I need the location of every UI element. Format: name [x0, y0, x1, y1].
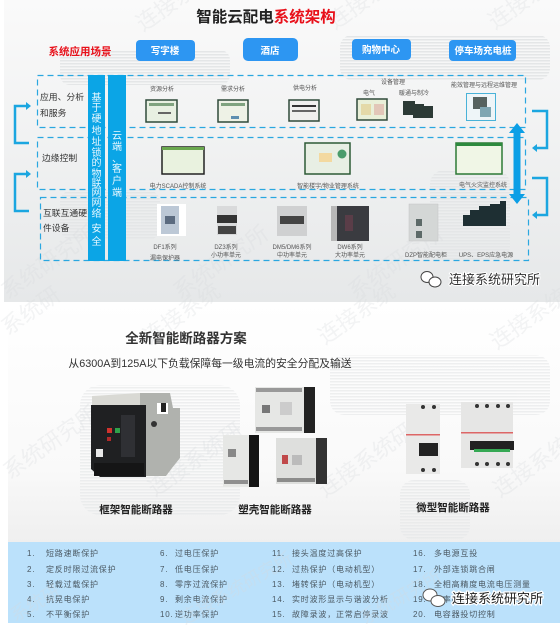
hardware devices: DZ3系列: [214, 243, 238, 251]
column 1: 2.: [27, 565, 35, 574]
column 2: 剩余电流保护: [175, 594, 228, 604]
column 3: 实时波形显示与谐波分析: [292, 594, 389, 604]
product: miniature breakers: [406, 402, 514, 474]
watermarks: [0, 0, 560, 304]
vertical bar: IoT security: 物: [92, 167, 102, 180]
scenario buttons: 购物中心: [362, 44, 400, 56]
vertical bar: IoT security: [88, 75, 105, 261]
application layer screens: 暖通与制冷: [399, 89, 429, 97]
watermarks: 系统研究所: [344, 221, 448, 304]
column 4: 功率因数电能质量管理: [434, 594, 522, 604]
subheading: 从6300A到125A以下负载保障每一级电流的安全分配及输送: [68, 356, 352, 370]
watermarks: [7, 548, 445, 625]
watermarks: 连接系统研究: [314, 406, 436, 502]
column 4: 16.: [413, 549, 427, 558]
vertical bar: cloud and client: [108, 75, 126, 261]
watermarks: [0, 278, 560, 502]
column 2: [160, 548, 228, 619]
product: frame breaker: [91, 393, 180, 477]
hardware devices: UPS、EPS应急电源: [459, 251, 513, 259]
wechat logo and source name: [423, 589, 543, 606]
watermarks: 系统研: [7, 581, 64, 625]
column 4: 全相高精度电流电压测量: [434, 579, 531, 589]
layer labels: 应用、分析: [40, 91, 84, 102]
scenario buttons: 写字楼: [151, 45, 180, 57]
panel: smart circuit breaker: [0, 278, 560, 542]
caption: moulded case breaker: 塑壳智能断路器: [238, 503, 312, 516]
column 2: 6.: [160, 549, 168, 558]
column 4: 17.: [413, 565, 427, 574]
column 4: 外部连锁跳合闸: [434, 564, 496, 574]
scenario buttons: 酒店: [260, 45, 280, 57]
column 1: [27, 548, 116, 619]
edge control screens: 电力SCADA控制系统: [150, 182, 206, 190]
column 2: 9.: [160, 595, 168, 604]
layer labels: 边缘控制: [42, 152, 77, 163]
column 4: [413, 548, 531, 619]
column 3: 11.: [272, 549, 285, 558]
hardware devices: 漏电保护器: [150, 254, 180, 262]
column 2: 逆功率保护: [175, 609, 219, 619]
hardware devices: 大功率单元: [335, 251, 365, 259]
column 2: 过电压保护: [175, 548, 219, 558]
watermarks: 系统研究所: [169, 221, 273, 304]
column 3: 15.: [272, 610, 286, 619]
heading: 全新智能断路器方案: [125, 330, 247, 346]
hardware devices: DF1系列: [153, 243, 177, 251]
column 4: 电容器投切控制: [434, 609, 496, 619]
layer labels: 和服务: [40, 107, 67, 118]
edge control screens: 电气火灾监控系统: [459, 181, 507, 189]
heading: application scenarios: 系统应用场景: [48, 45, 112, 58]
caption: frame breaker: 框架智能断路器: [99, 503, 173, 516]
hardware devices: 小功率单元: [211, 251, 241, 259]
title: 智能云配电系统架构: [196, 7, 336, 26]
watermarks: 连接系统: [314, 278, 400, 349]
column 3: 堵转保护（电动机型）: [292, 579, 380, 589]
column 3: 故障录波，正常启停录波: [292, 609, 389, 619]
column 2: 7.: [160, 565, 168, 574]
application layer screens: 能效管理与远程运维管理: [451, 81, 517, 89]
vertical bar: IoT security: 硬: [92, 113, 102, 125]
loop arrows: [15, 102, 547, 219]
vertical bar: IoT security: 基: [92, 91, 102, 104]
vertical bar: IoT security: 的: [92, 156, 102, 169]
hardware devices: DW6系列: [337, 243, 363, 251]
wechat logo and source name: 连接系统研究所: [449, 272, 540, 287]
column 3: [272, 548, 389, 619]
panel: protection functions list: [7, 542, 560, 625]
layer labels: [40, 91, 87, 233]
world map backdrop: [80, 355, 550, 540]
watermarks: 连接系统研: [144, 418, 248, 501]
vertical bar: IoT security: 络: [92, 207, 102, 220]
column 3: 接头温度过高保护: [292, 548, 362, 558]
layer labels: 件设备: [43, 222, 70, 233]
column 1: 轻载过载保护: [46, 579, 99, 589]
column 1: 5.: [27, 610, 35, 619]
dashed layer boxes: [38, 76, 528, 260]
hardware devices: [150, 201, 513, 262]
product: moulded case breakers: [223, 387, 327, 487]
application layer screens: 资源分析: [150, 85, 174, 93]
scenario buttons: 停车场充电桩: [454, 45, 512, 57]
caption: miniature breaker: 微型智能断路器: [416, 501, 490, 514]
column 1: 抗晃电保护: [46, 594, 90, 604]
column 4: 18.: [413, 580, 427, 589]
application layer screens: 设备管理: [381, 78, 405, 86]
edge control screens: 智能楼宇/物业管理系统: [297, 182, 359, 190]
hardware devices: DM5/DM6系列: [272, 243, 312, 251]
column 1: 1.: [27, 549, 35, 558]
column 4: 20.: [413, 610, 427, 619]
column 1: 不平衡保护: [46, 609, 90, 619]
column 4: 19.: [413, 595, 427, 604]
vertical bar: IoT security: 全: [92, 235, 102, 248]
column 2: 零序过流保护: [175, 579, 228, 589]
vertical bar: IoT security: 安: [92, 222, 102, 235]
column 1: 4.: [27, 595, 35, 604]
column 1: 定反时限过流保护: [46, 564, 116, 574]
scenario buttons: [136, 38, 516, 61]
column 1: 短路速断保护: [46, 548, 99, 558]
application layer screens: 供电分析: [293, 84, 317, 92]
column 3: 13.: [272, 580, 286, 589]
world map backdrop: [60, 35, 550, 260]
watermarks: 连接系统: [139, 278, 225, 349]
edge control screens: [150, 143, 507, 190]
hardware devices: DZP智能配电柜: [405, 251, 447, 259]
vertical bar: IoT security: 锁: [92, 146, 102, 159]
hardware devices: 中功率单元: [277, 251, 307, 259]
column 1: 3.: [27, 580, 35, 589]
column 3: 过热保护（电动机型）: [292, 564, 380, 574]
vertical bar: cloud and client: 端: [112, 186, 122, 199]
watermarks: 系统研究所: [0, 401, 103, 484]
panel: system architecture: [0, 0, 560, 304]
vertical bar: IoT security: 地: [92, 124, 102, 137]
column 2: 10.: [160, 610, 174, 619]
vertical bar: IoT security: 址: [92, 135, 102, 148]
vertical bar: IoT security: 网: [92, 197, 102, 209]
vertical bar: cloud and client: 、: [112, 154, 122, 165]
vertical bar: IoT security: 联: [92, 178, 102, 190]
vertical bar: cloud and client: 客: [112, 162, 122, 175]
layer labels: 互联互通硬: [43, 208, 87, 218]
vertical bar: IoT security: 于: [92, 103, 102, 114]
column 2: 低电压保护: [175, 564, 219, 574]
column 3: 12.: [272, 565, 286, 574]
double arrow: [509, 123, 525, 204]
column 4: 多电源互投: [434, 548, 478, 558]
column 2: 8.: [160, 580, 168, 589]
vertical bar: IoT security: 网: [92, 187, 102, 199]
application layer screens: 需求分析: [221, 85, 245, 93]
vertical bar: cloud and client: 云: [112, 131, 122, 142]
wechat logo and source name: 连接系统研究所: [452, 591, 543, 606]
vertical bar: cloud and client: 端: [112, 140, 122, 153]
column 3: 14.: [272, 595, 286, 604]
vertical bar: cloud and client: 户: [112, 174, 122, 187]
application layer screens: [146, 78, 517, 122]
application layer screens: 电气: [363, 89, 375, 97]
